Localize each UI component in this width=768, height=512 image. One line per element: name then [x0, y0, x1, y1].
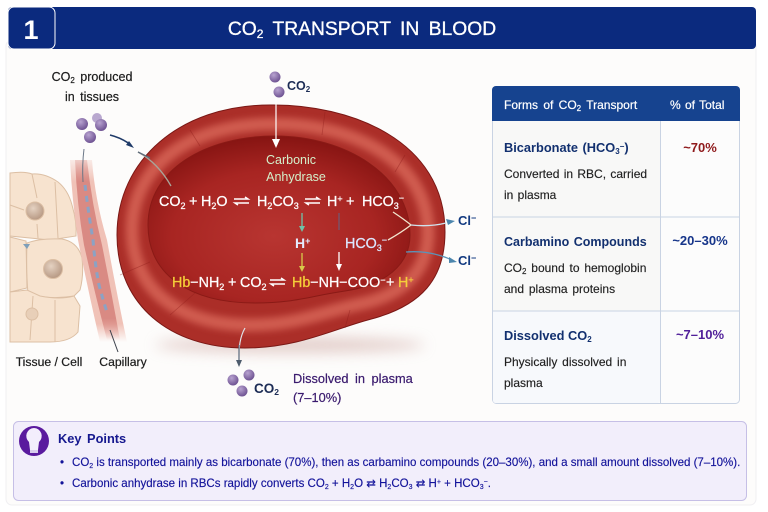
arrow: HCO3- to carbamino	[336, 213, 342, 271]
bullet: first point: •	[60, 457, 64, 469]
arrows: chloride shift	[388, 212, 457, 263]
label: CO2 produced in tissues: CO	[52, 70, 70, 84]
row: carbamino compounds	[504, 233, 728, 296]
row: bicarbonate	[504, 140, 717, 202]
label: Carbonic Anhydrase: Carbonic	[266, 153, 316, 167]
row: dissolved CO2: ~7–10%	[676, 327, 724, 342]
equation: carbonic acid reaction	[159, 193, 404, 211]
row: bicarbonate: Bicarbonate (HCO	[504, 140, 615, 155]
arrow: H+ to hemoglobin	[299, 253, 305, 272]
heading: Key Points: Key Points	[58, 431, 126, 446]
equation: carbonic acid reaction: 3	[294, 201, 299, 211]
bullet: second point: 2	[350, 484, 354, 491]
equation: carbamino reaction: +	[408, 275, 414, 285]
label: CO2 produced in tissues	[52, 70, 132, 104]
label: dissolved in plasma	[293, 371, 414, 405]
icon: dissolved CO2 molecules: 2	[274, 387, 279, 397]
bullet: second point: 2	[387, 484, 391, 491]
row: dissolved CO2: plasma	[504, 376, 543, 390]
bullet: second point: + HCO	[441, 478, 480, 490]
row: bicarbonate: 3	[615, 147, 620, 156]
equation: carbamino reaction	[172, 275, 414, 292]
bullet: first point: 2	[89, 463, 93, 470]
label: Carbonic Anhydrase: Anhydrase	[266, 170, 326, 184]
icon: dissolved CO2 molecules: CO	[254, 381, 274, 396]
equation: carbamino reaction: CO	[240, 275, 261, 291]
equation: carbamino reaction: Hb−NH	[172, 275, 219, 291]
label: H+: H	[295, 235, 305, 251]
equation: carbonic acid reaction: H	[257, 194, 267, 210]
equation: carbonic acid reaction: +	[337, 194, 343, 204]
equation: carbonic acid reaction: 2	[267, 201, 272, 211]
bullet: first point: CO	[72, 457, 89, 469]
equation: carbonic acid reaction: 2	[211, 201, 216, 211]
equation: carbonic acid reaction: CO	[159, 194, 180, 210]
equation: carbonic acid reaction: CO	[272, 194, 294, 210]
label: H+: +	[305, 236, 310, 246]
row: carbamino compounds: bound to hemoglobin	[526, 261, 646, 275]
table header: Forms of CO	[504, 98, 577, 112]
equation: carbamino reaction: −	[380, 275, 385, 285]
row: dissolved CO2	[504, 327, 724, 390]
equation: carbonic acid reaction: HCO	[362, 194, 394, 210]
equation: carbonic acid reaction: O	[216, 194, 227, 210]
arrow: CO2 dissolves to plasma	[236, 328, 245, 367]
badge: section number: 1	[23, 15, 39, 45]
label: dissolved in plasma: (7–10%)	[293, 390, 341, 405]
equation: carbonic acid reaction: 3	[394, 201, 399, 211]
equation: carbamino reaction: 2	[261, 282, 266, 292]
row: carbamino compounds: and plasma proteins	[504, 282, 615, 296]
panel: key points	[14, 422, 746, 500]
bullet: second point: O ⇄ H	[354, 478, 387, 490]
row: bicarbonate: in plasma	[504, 188, 557, 202]
title: 2	[257, 27, 264, 41]
row: bicarbonate: Converted in RBC, carried	[504, 167, 647, 181]
equation: carbonic acid reaction: 2	[180, 201, 185, 211]
table header: 2	[577, 104, 582, 113]
label: Carbonic Anhydrase	[266, 153, 326, 184]
title: CO	[228, 19, 257, 40]
bullet: second point: + H	[329, 478, 350, 490]
row: carbamino compounds: ~20–30%	[672, 233, 728, 248]
row: dissolved CO2: 2	[587, 335, 592, 344]
label: CO2 produced in tissues: 2	[70, 76, 75, 85]
bullet: second point: CO	[391, 478, 409, 490]
row: dissolved CO2: Physically dissolved in	[504, 355, 626, 369]
table header: Transport	[581, 98, 638, 112]
illustration: red blood cell	[117, 105, 445, 353]
icon: dissolved CO2 molecules	[228, 370, 279, 397]
row: dissolved CO2: Dissolved CO	[504, 328, 587, 343]
label: Cl- top: Cl	[458, 213, 471, 228]
label: CO2 produced in tissues: in tissues	[65, 90, 119, 104]
row: bicarbonate: −	[620, 142, 625, 151]
bullet: second point: Carbonic anhydrase in RBCs rapidly converts CO	[72, 478, 325, 490]
bullet: second point: ⇄ H	[412, 478, 437, 490]
table: forms of CO2 transport	[492, 86, 740, 404]
icon: CO2 molecules in tissue	[76, 113, 107, 143]
label: Capillary: Capillary	[99, 355, 148, 369]
bullet: second point: 2	[325, 484, 329, 491]
arrow: CO2 to red blood cell	[110, 135, 134, 148]
equation: carbamino reaction: H	[398, 275, 408, 291]
bullet: first point: is transported mainly as bicarbonate (70%), then as carbamino compounds (20–30%), and a small amount dissolved (7–10%).	[93, 457, 740, 469]
arrow: H+ down teal	[299, 213, 305, 232]
label: Tissue / Cell: Tissue / Cell	[16, 355, 82, 369]
bullet: second point: 3	[480, 484, 484, 491]
label: CO2 produced in tissues: produced	[75, 70, 132, 84]
bullet: second point: .	[488, 478, 491, 490]
equation: carbonic acid reaction: +	[189, 194, 197, 210]
row: bicarbonate: )	[624, 140, 629, 155]
table header: % of Total	[670, 98, 724, 112]
equation: carbamino reaction: +	[386, 275, 394, 291]
header bar	[8, 7, 756, 49]
row: carbamino compounds: CO	[504, 261, 522, 275]
bullet: second point: −	[484, 479, 488, 486]
equation: carbonic acid reaction: H	[201, 194, 211, 210]
icon: CO2 molecule entering	[270, 72, 311, 98]
bullet: second point: 3	[409, 484, 413, 491]
label: HCO3-: 3	[377, 243, 382, 253]
equation: carbamino reaction: Hb−NH−COO	[292, 275, 380, 291]
label: Cl- bottom: Cl	[458, 253, 471, 268]
row: carbamino compounds: Carbamino Compounds	[504, 235, 647, 249]
label: HCO3-: −	[382, 235, 387, 245]
illustration: capillary	[70, 149, 127, 352]
table header	[492, 86, 740, 121]
icon: light bulb	[19, 426, 49, 456]
row: carbamino compounds: 2	[522, 267, 527, 276]
icon: CO2 molecule entering: 2	[306, 85, 311, 94]
equation: carbamino reaction: 2	[219, 282, 224, 292]
arrow: CO2 into cell	[272, 98, 280, 148]
equation: carbamino reaction: +	[228, 275, 236, 291]
label: Cl- bottom: −	[471, 253, 476, 263]
icon: CO2 molecule entering: CO	[287, 79, 306, 93]
illustration: tissue cells	[10, 172, 83, 342]
label: dissolved in plasma: Dissolved in plasma	[293, 371, 414, 386]
label: HCO3-: HCO	[345, 236, 377, 252]
row: bicarbonate: ~70%	[683, 140, 717, 155]
label: Cl- top: −	[471, 213, 476, 223]
badge: section number	[8, 7, 55, 49]
equation: carbonic acid reaction: H	[327, 194, 337, 210]
equation: carbonic acid reaction: −	[399, 193, 404, 203]
bullet: second point: •	[60, 478, 64, 490]
bullet: second point: +	[437, 479, 441, 486]
equation: carbonic acid reaction: +	[346, 194, 354, 210]
title: TRANSPORT IN BLOOD	[263, 19, 496, 40]
